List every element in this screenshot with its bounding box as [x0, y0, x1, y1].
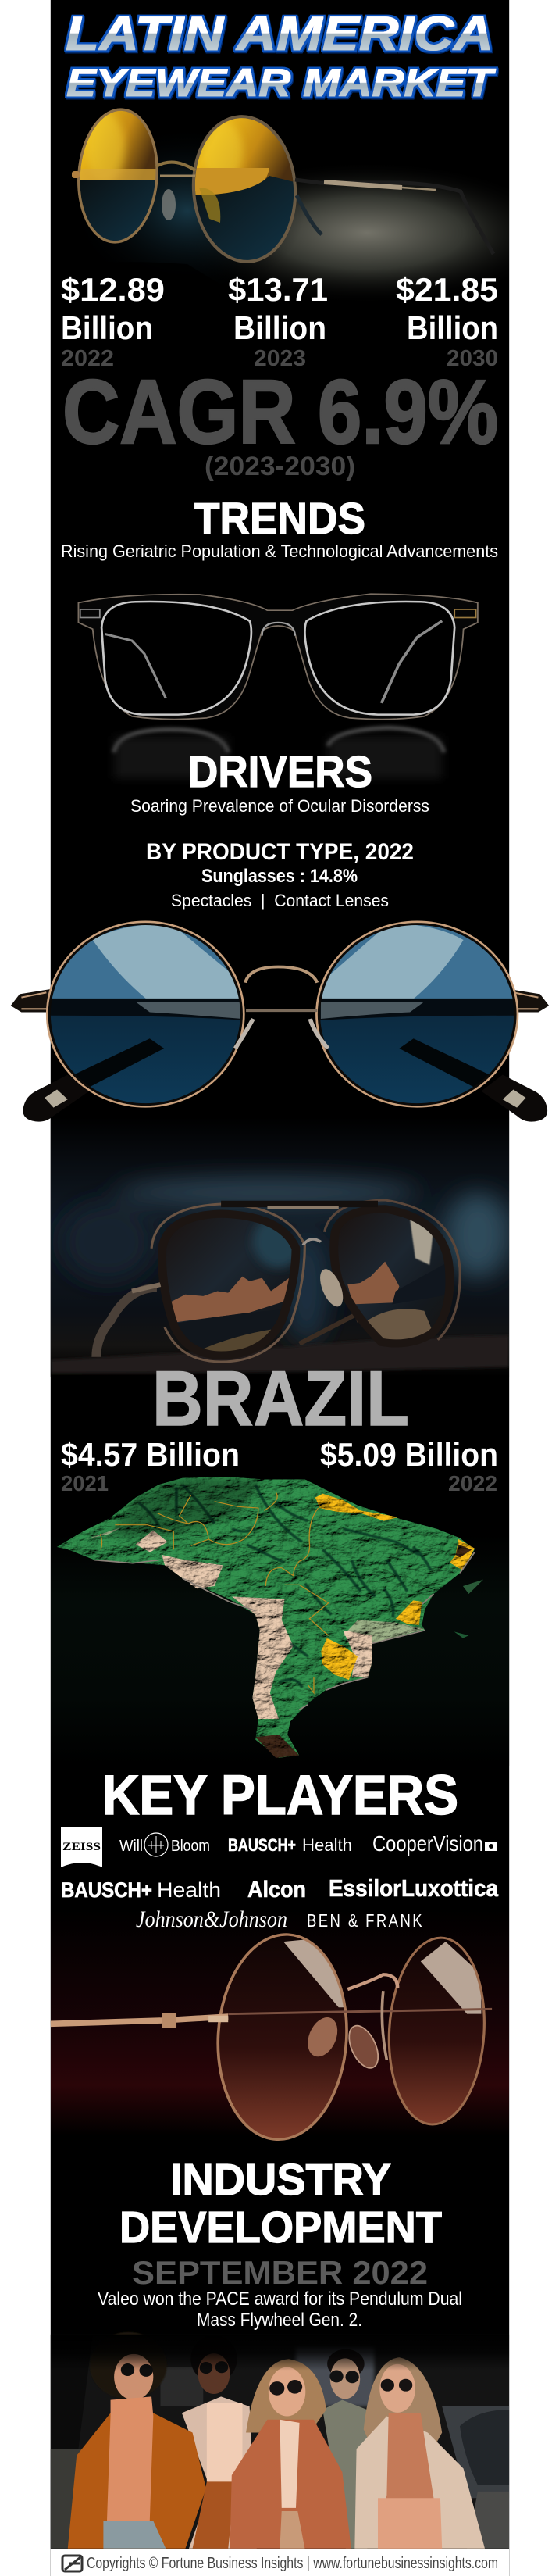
- stat: 2030: [396, 271, 498, 371]
- logo: Will Bloom: Will: [119, 1838, 143, 1855]
- heading: key players: KEY PLAYERS: [102, 1765, 458, 1827]
- stat: 2022: $12.89: [61, 271, 165, 308]
- stat: 2030: $21.85: [396, 271, 498, 308]
- stat: 2023: Billion: [233, 309, 326, 346]
- lens left: [46, 920, 246, 1108]
- stat: 2030: Billion: [407, 309, 498, 346]
- logo: EssilorLuxottica: EssilorLuxottica: [329, 1874, 499, 1902]
- stat: brazil values: 2022: [448, 1471, 497, 1495]
- heading: drivers: Soaring Prevalence of Ocular Disorderss: [130, 796, 429, 816]
- title: [66, 7, 497, 105]
- logo: Alcon: Alcon: [247, 1877, 306, 1903]
- logo: Bausch Health: BAUSCH+: [228, 1835, 296, 1855]
- photo: group wearing sunglasses: [51, 2332, 509, 2549]
- CAGR figure: (2023-2030): [205, 452, 355, 481]
- stat: brazil values: $5.09 Billion: [320, 1436, 498, 1473]
- frames: [47, 922, 518, 1106]
- image: aviator sunglasses: [51, 1117, 510, 1377]
- heading: drivers: DRIVERS: [188, 747, 372, 797]
- logos: key players: [61, 1827, 499, 1932]
- section: by distribution channel: Retail Stores | Online Stores | Ophthalmic Clinics: [93, 1151, 468, 1170]
- section: by product type: BY PRODUCT TYPE, 2022: [146, 839, 414, 865]
- logo: Will Bloom: Bloom: [171, 1838, 210, 1855]
- logo: CooperVision: CooperVision: [372, 1831, 483, 1856]
- text: development detail: [98, 2254, 462, 2331]
- logo: Bausch Health large: [61, 1878, 221, 1902]
- title: LATIN AMERICA: [66, 7, 493, 60]
- logo: Bausch Health: Health: [302, 1835, 352, 1855]
- logo: Johnson & Johnson: Johnson&Johnson: [136, 1906, 287, 1932]
- person: left: [68, 2332, 206, 2549]
- text: development detail: Valeo won the PACE award for its Pendulum Dual: [98, 2288, 462, 2310]
- heading: brazil: BRAZIL: [152, 1355, 409, 1442]
- logo: Zeiss: ZEISS: [62, 1841, 101, 1853]
- section: by distribution channel: BY DISTRIBUTION CHANNEL: [130, 1124, 429, 1150]
- right lens: [338, 1213, 445, 1339]
- temple tip right: [481, 989, 549, 1122]
- image: copper round glasses: [51, 1931, 492, 2142]
- temple tip left: [11, 989, 89, 1122]
- logo: Bausch Health large: Health: [157, 1878, 221, 1902]
- text: development detail: Mass Flywheel Gen. 2.: [197, 2310, 362, 2331]
- person: second from left: [182, 2335, 257, 2549]
- stat: 2022: Billion: [61, 309, 153, 346]
- heading: industry development: [119, 2155, 442, 2253]
- section: by product type: Sunglasses : 14.8%: [201, 866, 358, 887]
- image: clear square glasses: [78, 594, 478, 779]
- stat: 2023: 2023: [254, 346, 306, 371]
- section: by product type: Spectacles | Contact Lenses: [171, 891, 389, 910]
- person: right: [354, 2357, 485, 2549]
- image: yellow round sunglasses: [72, 108, 509, 291]
- stat: 2022: 2022: [61, 346, 114, 371]
- logo: Will Bloom: [119, 1833, 210, 1856]
- heading: drivers: [130, 747, 429, 816]
- stat: 2023: $13.71: [228, 271, 328, 308]
- stat: 2023: [228, 271, 328, 371]
- left lens: [166, 1218, 292, 1352]
- logo: Ben & Frank: BEN & FRANK: [307, 1910, 424, 1931]
- image: red background band: [51, 1909, 509, 2135]
- text: development detail: SEPTEMBER 2022: [132, 2254, 428, 2291]
- stat: brazil values: 2021: [61, 1471, 109, 1495]
- person: centre: [230, 2359, 351, 2549]
- heading: industry development: DEVELOPMENT: [119, 2203, 442, 2253]
- section: by product type: [146, 839, 414, 910]
- stat: brazil values: [61, 1436, 498, 1495]
- heading: trends: Rising Geriatric Population & Technological Advancements: [61, 541, 498, 561]
- logo: Bausch Health: [228, 1835, 352, 1855]
- CAGR figure: CAGR 6.9%: [62, 361, 498, 463]
- frames: [132, 1200, 460, 1362]
- stats row: [61, 271, 498, 371]
- person: back right: [322, 2349, 367, 2549]
- map: Brazil relief: [51, 1477, 509, 1766]
- title: EYEWEAR MARKET: [66, 61, 497, 105]
- lens right: [317, 920, 517, 1108]
- stat: 2022: [61, 271, 165, 371]
- logo: Bausch Health large: BAUSCH+: [61, 1878, 152, 1902]
- heading: trends: [61, 494, 498, 561]
- section: by distribution channel: [93, 1124, 468, 1170]
- heading: trends: TRENDS: [194, 494, 365, 544]
- heading: industry development: INDUSTRY: [170, 2155, 391, 2205]
- stat: 2030: 2030: [447, 346, 498, 371]
- image: blue round sunglasses: [11, 920, 549, 1122]
- stat: brazil values: $4.57 Billion: [61, 1436, 240, 1473]
- logo: Zeiss: [61, 1827, 102, 1867]
